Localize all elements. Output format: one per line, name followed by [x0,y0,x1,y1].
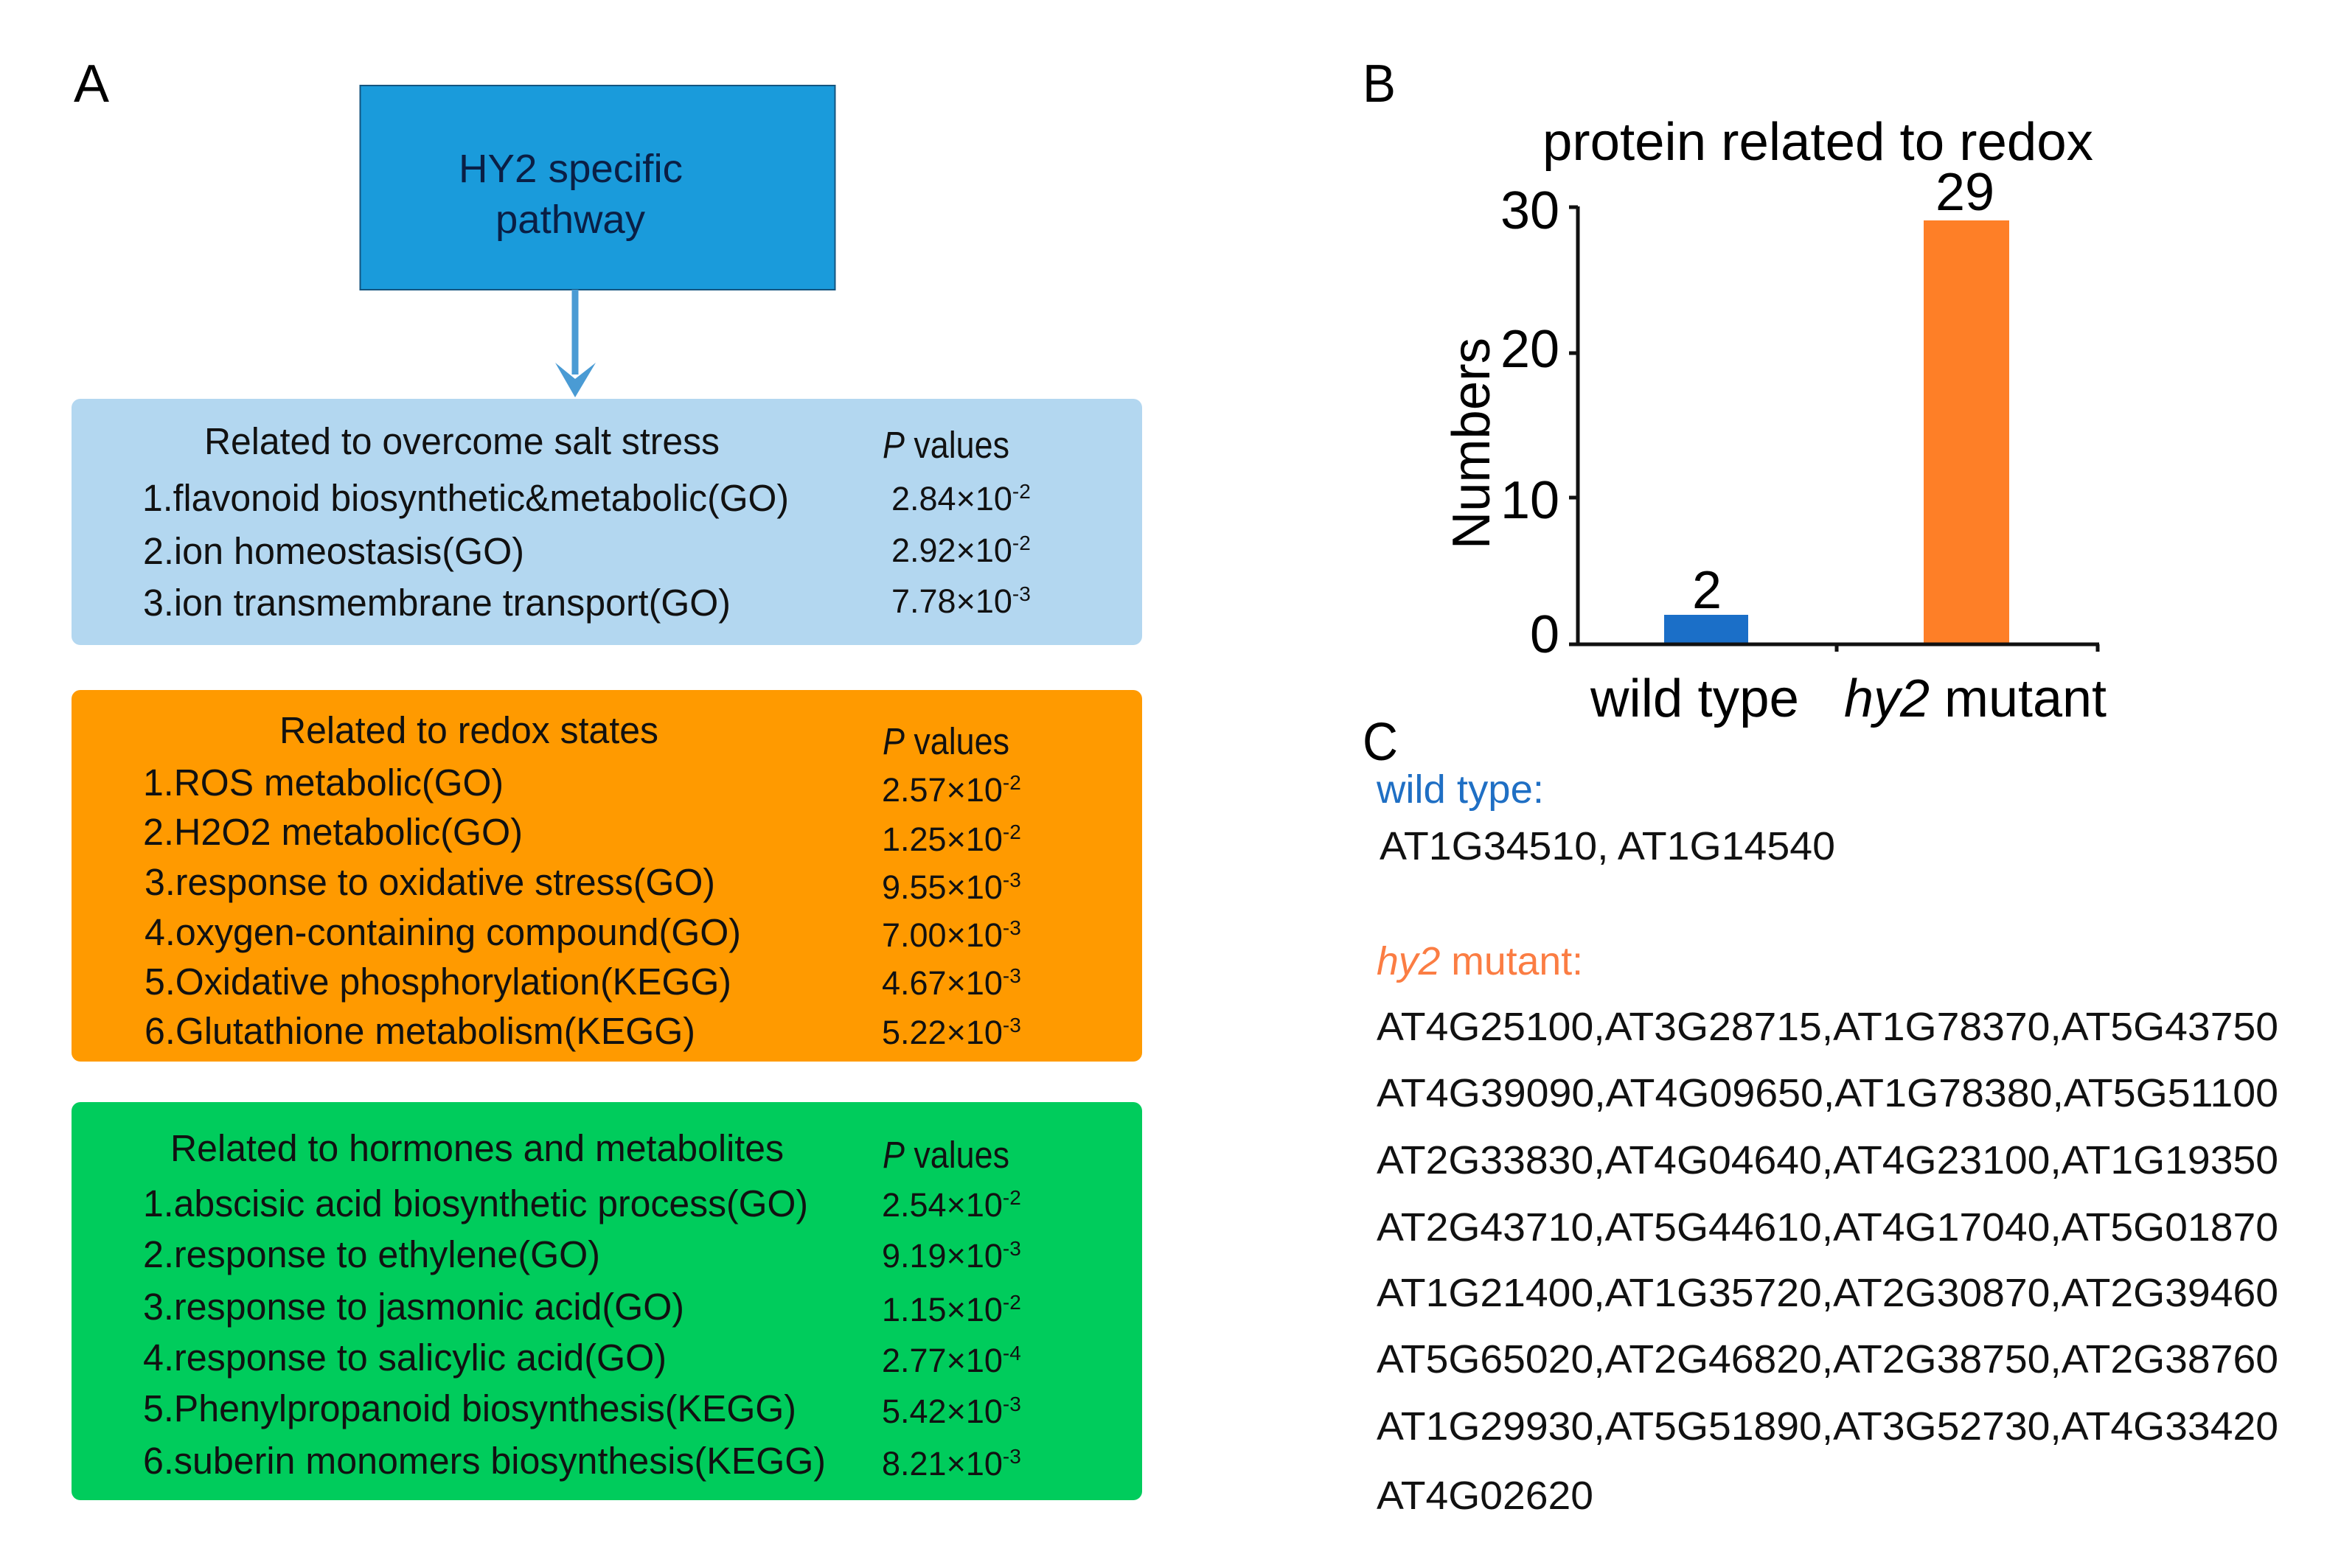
hormones P values: 2.54×10 [882,1186,1003,1224]
hormones P values: -3 [1003,1237,1021,1260]
y axis title: Numbers [1442,338,1501,549]
panel: hormones and metabolites [72,1102,1142,1500]
hormones P values: 8.21×10 [882,1445,1003,1482]
redox P values: -3 [1003,1014,1021,1036]
redox P values: -2 [1003,771,1021,794]
gene list: hy2 mutant: hy2 mutant: [1377,939,1583,983]
salt stress P values: 7.78×10 [891,582,1012,620]
salt stress P values: 2.92×10 [891,532,1012,569]
salt stress pathway list [142,477,789,624]
redox pathway list: 4.oxygen-containing compound(GO) [145,911,741,953]
salt stress pathway list: 2.ion homeostasis(GO) [143,530,524,572]
gene list: wild type: AT1G34510, AT1G14540 [1380,824,1835,868]
panel label B: B [1363,55,1396,114]
redox P values: 7.00×10 [882,916,1003,954]
hormones P values: 2.77×10 [882,1342,1003,1379]
hormones pathway list: 2.response to ethylene(GO) [143,1233,600,1275]
bar chart: protein related to redox [1442,113,2107,728]
redox pathway list: 2.H2O2 metabolic(GO) [143,811,523,853]
panel: salt stress [72,399,1142,645]
salt stress P values: -2 [1012,532,1031,554]
redox P values: 2.57×10 [882,771,1003,809]
hormones P values: -2 [1003,1291,1021,1314]
P values heading: P values [883,424,1009,466]
hormones pathway list: 3.response to jasmonic acid(GO) [143,1286,684,1328]
redox pathway list: 5.Oxidative phosphorylation(KEGG) [145,961,731,1003]
gene list: hy2 mutant: AT4G02620 [1377,1474,1593,1518]
hormones P values: 1.15×10 [882,1291,1003,1328]
hormones pathway list: 6.suberin monomers biosynthesis(KEGG) [143,1440,826,1482]
box: HY2 specific pathway: HY2 specific [459,147,683,191]
redox P values: -3 [1003,916,1021,939]
panel label A: A [74,55,109,114]
y axis tick labels: 0 [1530,605,1559,664]
x label: hy2 mutant: hy2 mutant [1844,669,2107,728]
gene list: wild type [1376,767,1835,868]
hormones P values: -3 [1003,1393,1021,1415]
redox P values: 9.55×10 [882,868,1003,906]
hormones P values: 9.19×10 [882,1237,1003,1275]
redox P values: -3 [1003,964,1021,987]
heading: salt stress: Related to overcome salt stress [204,420,720,462]
P values heading: P values [883,1134,1009,1176]
gene list: hy2 mutant: AT4G25100,AT3G28715,AT1G78370,AT5G43750 [1377,1005,2278,1049]
bar: wild type [1664,615,1748,643]
redox P values [882,771,1021,1051]
redox P values: 4.67×10 [882,964,1003,1002]
gene list: hy2 mutant: AT5G65020,AT2G46820,AT2G38750,AT2G38760 [1377,1337,2278,1381]
hormones pathway list [143,1182,826,1482]
gene list: hy2 mutant: AT1G29930,AT5G51890,AT3G52730,AT4G33420 [1377,1404,2278,1449]
y axis tick labels [1500,181,1559,664]
salt stress P values [891,480,1031,620]
salt stress pathway list: 1.flavonoid biosynthetic&metabolic(GO) [142,477,789,519]
hormones P values: -2 [1003,1186,1021,1209]
gene list: wild type: wild type: [1376,767,1544,812]
hormones P values: -4 [1003,1342,1021,1365]
panel: redox states [72,690,1142,1062]
redox pathway list: 3.response to oxidative stress(GO) [145,861,715,903]
hormones P values [882,1186,1021,1482]
redox pathway list: 1.ROS metabolic(GO) [143,762,504,804]
bar: hy2 mutant [1924,220,2009,643]
gene list: hy2 mutant: AT2G33830,AT4G04640,AT4G23100,AT1G19350 [1377,1138,2278,1182]
redox P values: 1.25×10 [882,820,1003,858]
x label: wild type: wild type [1590,669,1799,728]
P values heading: P values [883,720,1009,762]
box: HY2 specific pathway [360,86,835,290]
redox pathway list: 6.Glutathione metabolism(KEGG) [145,1010,695,1052]
chart title: protein related to redox [1542,113,2093,172]
y axis tick labels: 20 [1500,320,1559,379]
hormones P values: -3 [1003,1445,1021,1468]
gene list: hy2 mutant: AT1G21400,AT1G35720,AT2G30870,AT2G39460 [1377,1271,2278,1315]
value label: 2: 2 [1692,561,1722,620]
hormones pathway list: 1.abscisic acid biosynthetic process(GO) [143,1182,808,1224]
box: HY2 specific pathway: pathway [495,198,645,242]
y axis tick labels: 10 [1500,471,1559,530]
gene list: hy2 mutant: AT2G43710,AT5G44610,AT4G17040,AT5G01870 [1377,1205,2278,1250]
value label: 29: 29 [1935,163,1994,222]
redox P values: -3 [1003,868,1021,891]
panel label C: C [1363,713,1398,772]
hormones P values: 5.42×10 [882,1393,1003,1430]
hormones pathway list: 5.Phenylpropanoid biosynthesis(KEGG) [143,1387,796,1429]
salt stress P values: -2 [1012,480,1031,503]
redox P values: 5.22×10 [882,1014,1003,1051]
redox P values: -2 [1003,820,1021,843]
redox pathway list [143,762,741,1052]
heading: hormones and metabolites: Related to hormones and metabolites [170,1127,784,1169]
heading: redox states: Related to redox states [279,709,658,751]
salt stress P values: 2.84×10 [891,480,1012,518]
salt stress P values: -3 [1012,582,1031,605]
y axis tick labels: 30 [1500,181,1559,240]
arrow: pathway to categories [555,290,596,397]
hormones pathway list: 4.response to salicylic acid(GO) [143,1337,667,1379]
salt stress pathway list: 3.ion transmembrane transport(GO) [143,582,731,624]
axes [1569,206,2099,652]
gene list: hy2 mutant [1377,939,2278,1518]
gene list: hy2 mutant: AT4G39090,AT4G09650,AT1G78380,AT5G51100 [1377,1071,2278,1115]
